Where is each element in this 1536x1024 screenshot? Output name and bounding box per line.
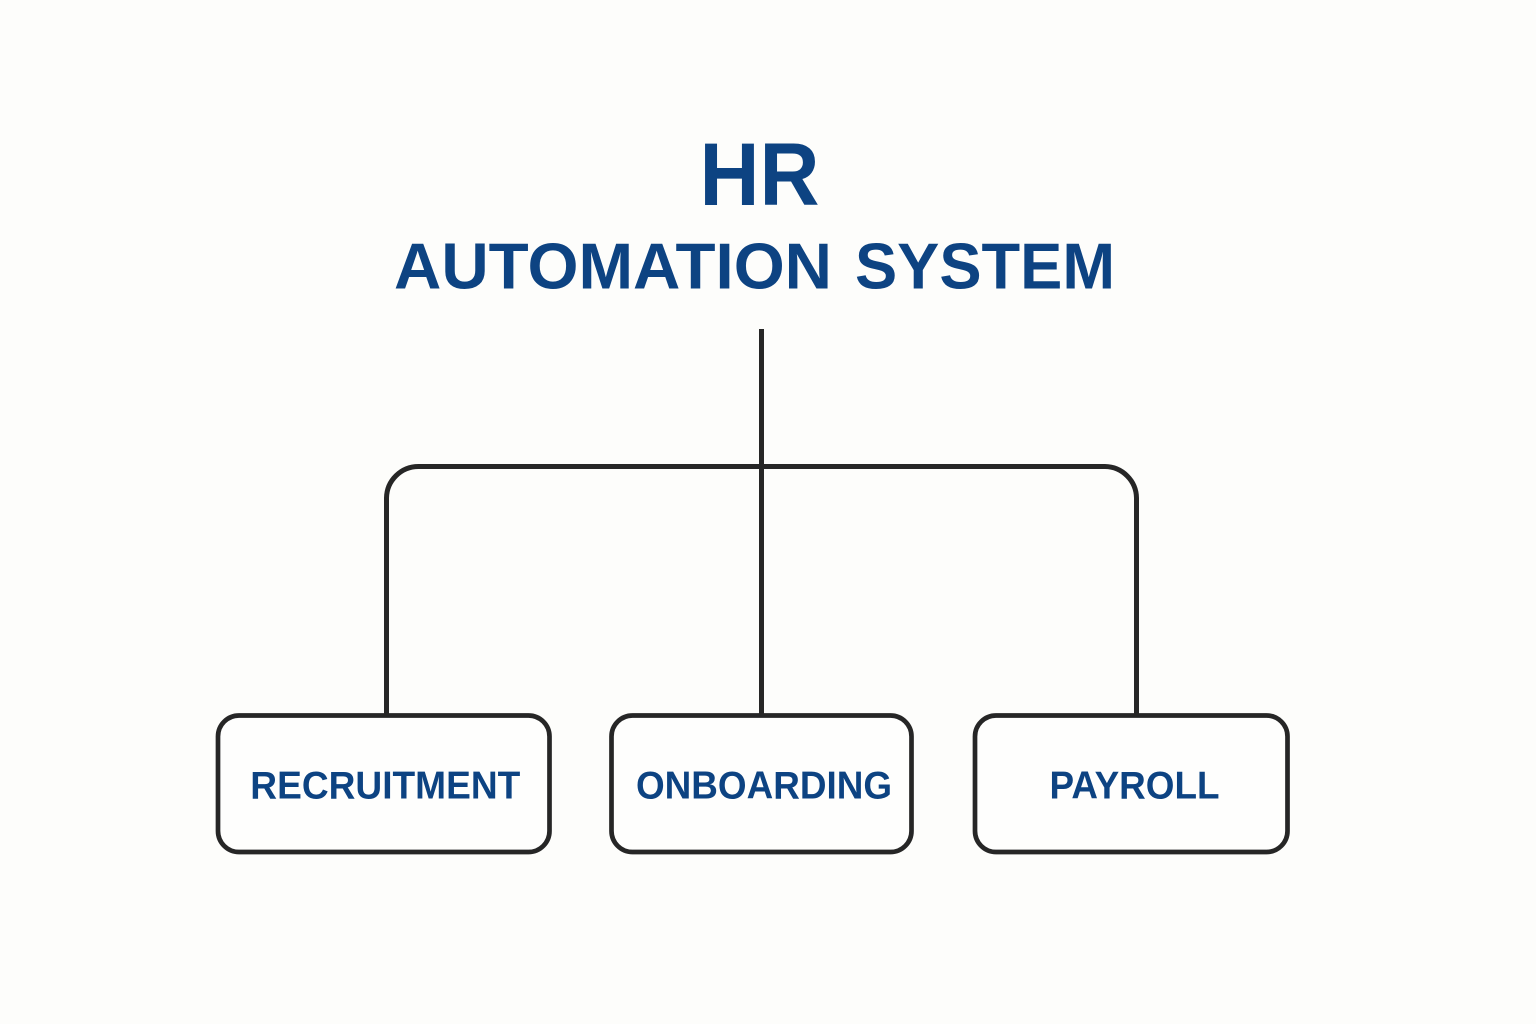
box: Onboarding [612, 716, 912, 852]
connector lines [386, 329, 1136, 715]
box: Onboarding: ONBOARDING [636, 764, 892, 808]
box: Payroll [975, 716, 1288, 852]
box: Recruitment [218, 716, 550, 852]
subtitle: Automation System: AUTOMATION [394, 230, 832, 302]
box: Recruitment: RECRUITMENT [250, 764, 520, 808]
subtitle: Automation System: SYSTEM [855, 230, 1115, 302]
subtitle: Automation System [394, 230, 1115, 302]
box: Payroll: PAYROLL [1050, 764, 1220, 808]
title: HR: HR [700, 124, 820, 224]
